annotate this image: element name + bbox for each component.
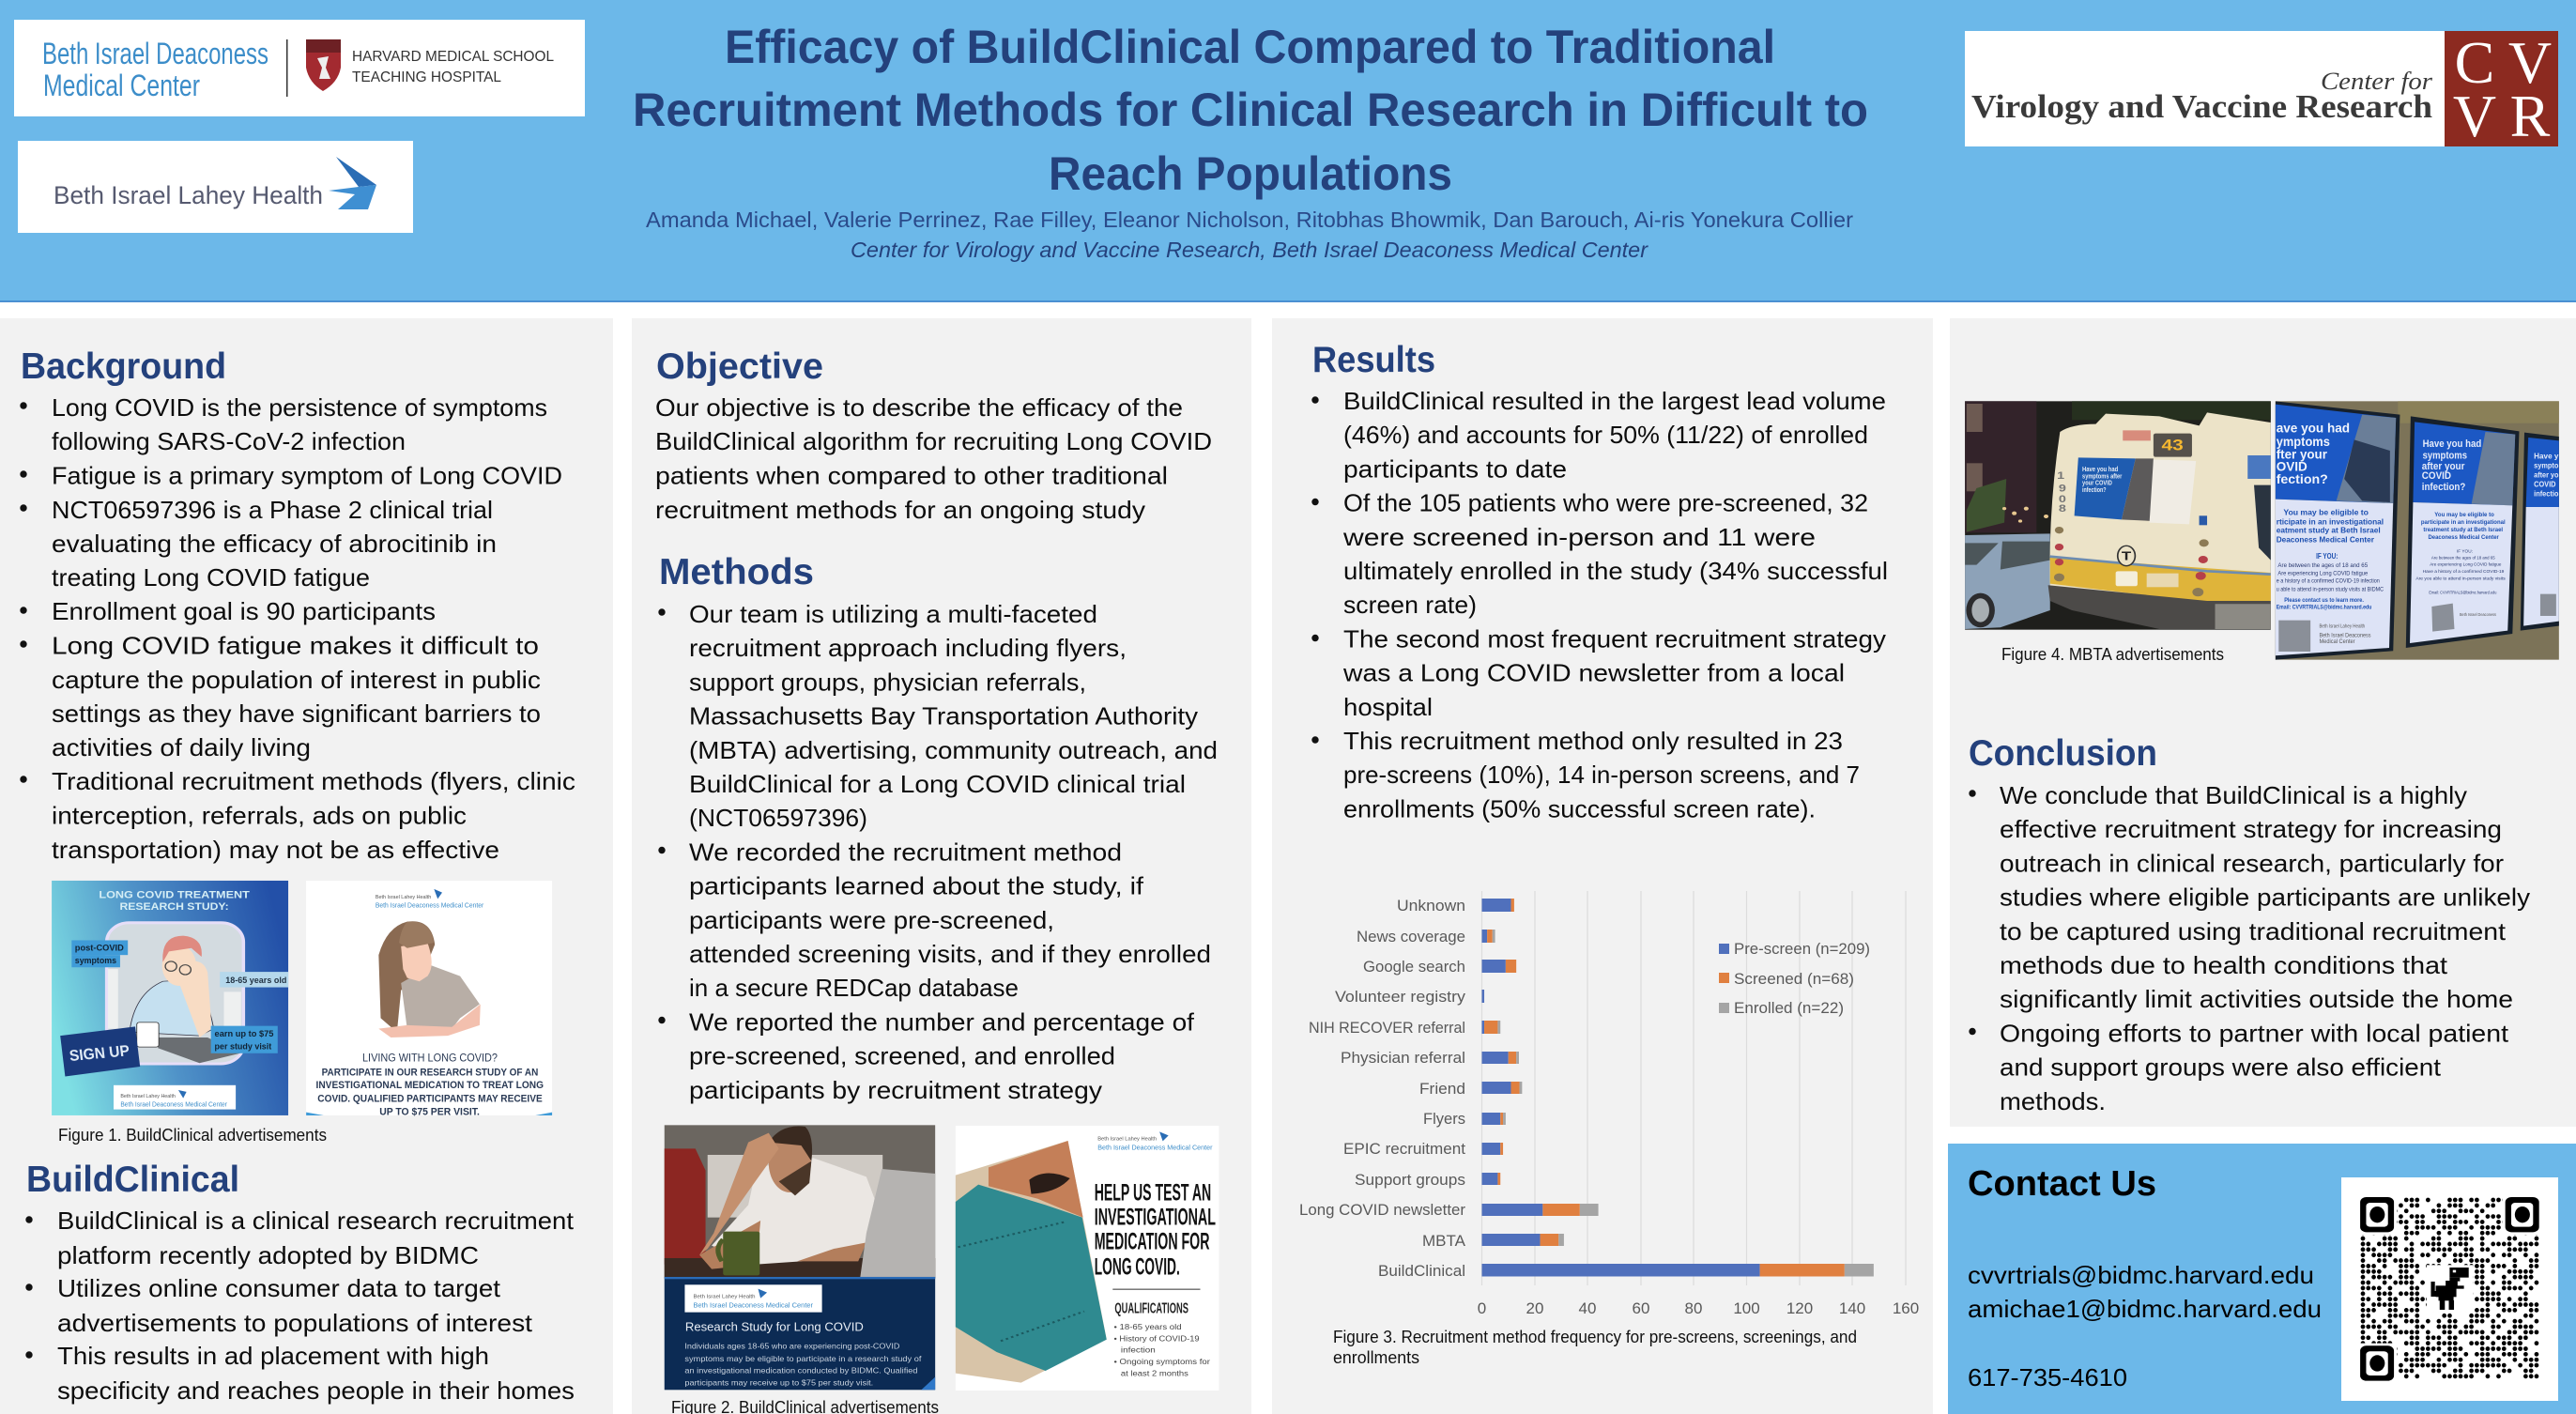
figure: MBTA station poster photo: sympto (2534, 461, 2558, 470)
figure: Long COVID treatment research study ad: earn up to $75 (215, 1030, 274, 1039)
figure: Long COVID treatment research study ad: Beth Israel Lahey Health (120, 1094, 176, 1099)
text block: Background bullets: Long COVID is the persistence of symptoms (52, 393, 547, 422)
figure: MBTA station poster photo: Beth Israel Deaconess (2319, 631, 2371, 638)
category labels: Google search (1363, 958, 1465, 976)
text block: Results bullets: The second most frequent recruitment strategy (1343, 625, 1886, 653)
text block: Objective (655, 393, 1212, 524)
text block: Methods bullets: We recorded the recruitment method (689, 838, 1122, 866)
authors: Amanda Michael, Valerie Perrinez, Rae Filley, Eleanor Nicholson, Ritobhas Bhowmik, Dan Barouch, Ai-ris Yonekura Collier (646, 207, 1853, 232)
figure: MBTA station poster photo: u able to attend in-person study visits at BIDMC (2277, 587, 2384, 592)
text block: Conclusion bullets: Ongoing efforts to partner with local patient (2000, 1020, 2509, 1048)
text block: Objective: BuildClinical algorithm for recruiting Long COVID (655, 427, 1212, 455)
figure: Living with Long COVID ad: Beth Israel Lahey Health (376, 895, 431, 900)
figure: MBTA station poster photo: rticipate in an investigational (2277, 517, 2384, 526)
text block: Methods bullets: BuildClinical for a Long COVID clinical trial (689, 770, 1186, 798)
axis tick labels: 60 (1633, 1299, 1649, 1317)
text block: Methods bullets: (MBTA) advertising, community outreach, and (689, 736, 1218, 764)
figure: MBTA station poster photo: You may be eligible to (2434, 511, 2494, 518)
legend: Screened (n=68) (1734, 970, 1854, 988)
text block: Conclusion bullets: and support groups were also efficient (2000, 1053, 2442, 1082)
figure: MBTA station poster photo: fection? (2277, 473, 2328, 486)
figure: MBTA bus advertisement photo: your COVID (2082, 479, 2112, 486)
figure: Research Study for Long COVID ad: participants may receive up to $75 per study visit. (684, 1379, 873, 1388)
logo: Center for Virology and Vaccine Research: Virology and Vaccine Research (1971, 88, 2432, 125)
figure: MBTA station poster photo: IF YOU: (2316, 552, 2338, 561)
bar chart: recruitment method frequency (1299, 891, 1919, 1317)
figure: MBTA station poster photo: COVID (2422, 469, 2451, 482)
icon: QR code with dinosaur (2341, 1177, 2558, 1401)
figure: MBTA station poster photo: eatment study at Beth Israel (2277, 527, 2381, 534)
text block: Results bullets: were screened in-person and 11 were (1342, 523, 1816, 551)
logo: Beth Israel Lahey Health: Beth Israel Lahey Health (54, 181, 323, 209)
category labels: NIH RECOVER referral (1309, 1019, 1465, 1037)
panel: Objective and Methods: HELP US TEST AN (1095, 1179, 1211, 1206)
title: Reach Populations (1049, 147, 1452, 200)
text block: BuildClinical bullets: advertisements to populations of interest (57, 1309, 533, 1337)
figure: MBTA station poster photo: Beth Israel Deaconess (2460, 612, 2496, 618)
text block: Background bullets: transportation) may not be as effective (52, 836, 499, 864)
figure: Help us test an investigational medication ad: Beth Israel Deaconess Medical Center (1097, 1144, 1213, 1151)
figure: Help us test an investigational medication ad: • History of COVID-19 (1114, 1334, 1200, 1344)
caption: Figure 4: Figure 4. MBTA advertisements (2001, 645, 2224, 664)
figure: MBTA bus advertisement photo: 9 (2059, 482, 2066, 494)
figure: MBTA station poster photo: fter your (2277, 448, 2327, 462)
figure: Research Study for Long COVID ad: Research Study for Long COVID (685, 1320, 864, 1334)
text block: Background bullets: Fatigue is a primary symptom of Long COVID (52, 462, 562, 490)
figure: MBTA station poster photo: OVID (2277, 460, 2308, 474)
text block: Results bullets: screen rate) (1343, 591, 1477, 619)
axis tick labels: 100 (1733, 1299, 1760, 1317)
text block: Conclusion bullets: We conclude that BuildClinical is a highly (2000, 781, 2467, 809)
text block: Results bullets: pre-screens (10%), 14 in-person screens, and 7 (1343, 761, 1860, 789)
figure: MBTA station poster photo: Are experiencing Long COVID fatigue (2277, 571, 2368, 576)
caption: Figure 1: Figure 1. BuildClinical advertisements (58, 1126, 327, 1145)
logo: Center for Virology and Vaccine Research: C (2455, 29, 2494, 96)
figure: Living with Long COVID ad (306, 881, 552, 1117)
category labels: Long COVID newsletter (1299, 1201, 1465, 1219)
text block: Background bullets: Traditional recruitment methods (flyers, clinic (52, 767, 575, 795)
panel: Objective and Methods: MEDICATION FOR (1095, 1228, 1209, 1255)
heading: Results: Results (1312, 340, 1435, 380)
text block: BuildClinical bullets: This results in ad placement with high (57, 1342, 489, 1370)
text block: Background bullets: capture the population of interest in public (52, 666, 541, 694)
contact details: cvvrtrials@bidmc.harvard.edu (1968, 1261, 2314, 1289)
logo: Beth Israel Deaconess Medical Center / Harvard Medical School: TEACHING HOSPITAL (352, 69, 501, 85)
text block: Conclusion bullets: to be captured using traditional recruitment (2000, 917, 2507, 945)
figure: Living with Long COVID ad: UP TO $75 PER VISIT. (379, 1105, 480, 1117)
text block: Results bullets: was a Long COVID newsletter from a local (1342, 659, 1845, 687)
category labels (1299, 897, 1466, 1280)
text block: Results bullets (1311, 387, 1888, 822)
axis tick labels: 80 (1685, 1299, 1702, 1317)
figure: Help us test an investigational medication ad: Beth Israel Lahey Health (1097, 1137, 1157, 1142)
text block: Methods bullets: Our team is utilizing a multi-faceted (689, 600, 1097, 628)
heading: Contact Us: Contact Us (1968, 1164, 2156, 1204)
heading: BuildClinical: BuildClinical (26, 1160, 239, 1200)
figure: MBTA station poster photo: Have y (2534, 452, 2559, 461)
figure: MBTA station poster photo: treatment study at Beth Israel (2423, 526, 2503, 533)
figure: MBTA bus advertisement photo: Have you had (2082, 465, 2118, 473)
category labels: Support groups (1355, 1171, 1465, 1189)
heading: Background: Background (21, 346, 226, 387)
figure: MBTA station poster photo: Have you had (2423, 438, 2481, 450)
figure: MBTA station poster photo: ymptoms (2277, 436, 2330, 449)
heading: Methods: Methods (659, 552, 814, 592)
figure: Research Study for Long COVID ad (665, 1125, 935, 1390)
figure: MBTA station poster photo: Please contact us to learn more. (2284, 598, 2364, 604)
figure: Help us test an investigational medication ad: infection (1121, 1346, 1156, 1355)
text block: Conclusion bullets: significantly limit activities outside the home (2000, 985, 2513, 1013)
text block: Methods bullets: support groups, physician referrals, (689, 669, 1086, 697)
caption: Figure 3: enrollments (1333, 1348, 1419, 1367)
title (633, 21, 1868, 200)
panel: Objective and Methods: INVESTIGATIONAL (1095, 1204, 1216, 1230)
figure: MBTA station poster photo: Are you able to attend in-person study visits (2415, 576, 2506, 581)
text block: Background bullets: Long COVID fatigue makes it difficult to (52, 631, 539, 659)
text block: Results bullets: (46%) and accounts for 50% (11/22) of enrolled (1343, 421, 1868, 449)
panel: Objective and Methods (632, 318, 1251, 1414)
figure: MBTA bus advertisement photo: 43 (2162, 437, 2184, 454)
legend: Pre-screen (n=209) (1734, 940, 1870, 958)
logo: Beth Israel Deaconess Medical Center / Harvard Medical School: Beth Israel Deaconess (42, 37, 268, 70)
figure: Research Study for Long COVID ad: an investigational medication conducted by BIDMC. Qualified (684, 1366, 918, 1376)
text block: Conclusion bullets: methods due to health conditions that (2000, 951, 2448, 979)
text block: Background bullets: Enrollment goal is 90 participants (52, 597, 436, 625)
figure: MBTA station poster photo: Medical Center (2319, 638, 2355, 645)
text block: Methods bullets: in a secure REDCap database (689, 974, 1019, 1002)
logo: Beth Israel Deaconess Medical Center / Harvard Medical School: HARVARD MEDICAL SCHOOL (352, 49, 554, 65)
axis tick labels: 0 (1478, 1299, 1486, 1317)
figure: MBTA station poster photo: Email: CVVRTRIALS@bidmc.harvard.edu (2277, 605, 2371, 610)
affiliation: Center for Virology and Vaccine Research, Beth Israel Deaconess Medical Center (851, 238, 1648, 262)
figure: Help us test an investigational medication ad: LONG COVID. (1095, 1253, 1180, 1281)
text block: BuildClinical bullets (25, 1207, 575, 1405)
figure: Long COVID treatment research study ad: 18-65 years old (225, 976, 286, 986)
text block: Results bullets: BuildClinical resulted in the largest lead volume (1343, 387, 1886, 415)
panel: Contact Us (1948, 1144, 2576, 1414)
figure: MBTA station poster photo: IF YOU: (2457, 549, 2473, 554)
figure: MBTA station poster photo: Are between the ages of 18 and 65 (2277, 563, 2368, 569)
contact details: 617-735-4610 (1968, 1363, 2127, 1391)
figure: Long COVID treatment research study ad (52, 881, 288, 1115)
figure: MBTA station poster photo: Deaconess Medical Center (2429, 533, 2499, 541)
figure: MBTA station poster photo: Deaconess Medical Center (2277, 535, 2374, 544)
figure: MBTA station poster photo: Email: CVVRTRIALS@bidmc.harvard.edu (2429, 591, 2496, 595)
figure: Long COVID treatment research study ad: RESEARCH STUDY: (120, 900, 229, 913)
legend: Enrolled (n=22) (1734, 999, 1844, 1017)
figure: MBTA station poster photo: COVID (2534, 480, 2555, 489)
logo: Beth Israel Lahey Health (18, 141, 413, 233)
text block: Conclusion bullets: studies where eligible participants are unlikely (2000, 883, 2530, 911)
figure: Living with Long COVID ad: COVID. QUALIFIED PARTICIPANTS MAY RECEIVE (317, 1092, 543, 1104)
figure: MBTA bus advertisement photo: 0 (2059, 492, 2066, 505)
figure: Living with Long COVID ad: INVESTIGATIONAL MEDICATION TO TREAT LONG (316, 1079, 544, 1091)
figure: MBTA station poster photo: symptoms (2423, 450, 2467, 461)
text block: Objective: Our objective is to describe the efficacy of the (655, 393, 1183, 422)
figure: MBTA station poster photo: infectio (2534, 489, 2558, 499)
figure: MBTA station poster photo (2276, 401, 2559, 660)
axis tick labels: 140 (1839, 1299, 1865, 1317)
axis tick labels: 40 (1579, 1299, 1596, 1317)
figure: Help us test an investigational medication ad: QUALIFICATIONS (1114, 1300, 1188, 1316)
figure: Long COVID treatment research study ad: post-COVID (75, 944, 124, 953)
text block: Conclusion bullets: outreach in clinical research, particularly for (2000, 849, 2504, 877)
contact details (1968, 1261, 2322, 1391)
figure: MBTA station poster photo: Have a history of a confirmed COVID-19 (2423, 569, 2504, 575)
figure: MBTA bus advertisement photo (1965, 401, 2271, 630)
category labels: News coverage (1357, 928, 1465, 945)
logo: Center for Virology and Vaccine Research: R (2510, 83, 2551, 149)
text block: Results bullets: enrollments (50% successful screen rate). (1343, 794, 1816, 822)
figure: MBTA station poster photo: after your (2422, 460, 2465, 472)
title: Efficacy of BuildClinical Compared to Traditional (725, 21, 1775, 73)
figure: Living with Long COVID ad: PARTICIPATE IN OUR RESEARCH STUDY OF AN (322, 1066, 538, 1078)
figure: Help us test an investigational medication ad: at least 2 months (1121, 1369, 1188, 1378)
text block: Methods bullets: (NCT06597396) (689, 804, 867, 832)
figure: Long COVID treatment research study ad: SIGN UP (69, 1042, 130, 1065)
figure: MBTA station poster photo: infection? (2422, 481, 2465, 493)
axis tick labels: 20 (1526, 1299, 1543, 1317)
figure: Long COVID treatment research study ad: per study visit (215, 1042, 272, 1052)
figure: MBTA station poster photo: Beth Israel Lahey Health (2319, 623, 2365, 629)
figure: Long COVID treatment research study ad: symptoms (75, 957, 116, 966)
text block: BuildClinical bullets: specificity and reaches people in their homes (57, 1376, 575, 1405)
caption: Figure 3: Figure 3. Recruitment method frequency for pre-screens, screenings, and (1333, 1328, 1857, 1346)
figure: MBTA station poster photo: Are experiencing Long COVID fatigue (2430, 562, 2501, 567)
text block: BuildClinical bullets: BuildClinical is a clinical research recruitment (57, 1207, 575, 1235)
contact details: amichae1@bidmc.harvard.edu (1968, 1295, 2322, 1323)
figure: Help us test an investigational medication ad: • 18-65 years old (1114, 1323, 1182, 1332)
text block: Background bullets: NCT06597396 is a Phase 2 clinical trial (52, 496, 493, 524)
heading: Conclusion: Conclusion (1969, 733, 2157, 774)
logo: Center for Virology and Vaccine Research: Center for (2321, 68, 2433, 95)
category labels: BuildClinical (1378, 1262, 1465, 1280)
text block: Methods bullets: pre-screened, screened, and enrolled (689, 1042, 1115, 1070)
text block: Methods bullets: attended screening visits, and if they enrolled (689, 940, 1211, 968)
axis tick labels (1478, 1299, 1919, 1317)
logo: Center for Virology and Vaccine Research: V (2453, 83, 2496, 149)
text block: Background bullets: following SARS-CoV-2 infection (52, 427, 406, 455)
figure: MBTA bus advertisement photo: symptoms after (2082, 471, 2123, 480)
text block: Methods bullets: participants were pre-screened, (689, 906, 1054, 934)
text block: BuildClinical bullets: Utilizes online consumer data to target (57, 1274, 501, 1302)
figure: MBTA bus advertisement photo: infection? (2082, 485, 2106, 494)
figure: MBTA station poster photo: after yo (2534, 470, 2558, 480)
category labels: MBTA (1422, 1232, 1466, 1250)
figure: MBTA bus advertisement photo: 1 (2057, 469, 2064, 482)
figure: MBTA bus advertisement photo: T (2122, 549, 2132, 563)
panel: Background and BuildClinical (0, 318, 613, 1414)
figure: MBTA bus advertisement photo: 8 (2059, 501, 2066, 515)
text block: Background bullets (20, 393, 575, 864)
text block: Conclusion bullets: methods. (2000, 1087, 2106, 1115)
category labels: Physician referral (1341, 1049, 1465, 1067)
figure: MBTA station poster photo: e a history of a confirmed COVID-19 infection (2277, 578, 2380, 584)
header banner (0, 0, 2576, 302)
category labels: Flyers (1423, 1110, 1465, 1128)
text block: Conclusion bullets: effective recruitment strategy for increasing (2000, 815, 2502, 843)
text block: Objective: recruitment methods for an ongoing study (655, 496, 1145, 524)
figure: Help us test an investigational medication ad (956, 1126, 1219, 1391)
figure: Long COVID treatment research study ad: LONG COVID TREATMENT (99, 888, 250, 900)
figure: MBTA station poster photo: ave you had (2277, 422, 2350, 436)
text block: Methods bullets: We reported the number and percentage of (689, 1008, 1195, 1037)
text block: Background bullets: interception, referrals, ads on public (52, 802, 467, 830)
logo: Beth Israel Deaconess Medical Center / Harvard Medical School (14, 20, 585, 116)
axis tick labels: 160 (1893, 1299, 1919, 1317)
panel: Results (1272, 318, 1933, 1414)
text block: Results bullets: participants to date (1343, 454, 1567, 483)
figure: Long COVID treatment research study ad: Beth Israel Deaconess Medical Center (120, 1100, 227, 1108)
logo: Beth Israel Deaconess Medical Center / Harvard Medical School: Medical Center (43, 69, 200, 102)
text block: Methods bullets (658, 600, 1218, 1104)
category labels: Unknown (1397, 897, 1465, 914)
text block: Background bullets: evaluating the efficacy of abrocitinib in (52, 530, 497, 558)
figure: Help us test an investigational medication ad: • Ongoing symptoms for (1114, 1358, 1211, 1367)
title: Recruitment Methods for Clinical Research in Difficult to (633, 84, 1868, 136)
logo: Center for Virology and Vaccine Research (1965, 29, 2558, 149)
text block: Background bullets: settings as they have significant barriers to (52, 699, 541, 728)
figure: Living with Long COVID ad: LIVING WITH LONG COVID? (362, 1051, 498, 1064)
figure: MBTA station poster photo: participate in an investigational (2421, 518, 2506, 526)
logo: Center for Virology and Vaccine Research: V (2508, 29, 2552, 96)
category labels: Volunteer registry (1335, 988, 1466, 1006)
text block: Methods bullets: participants by recruitment strategy (689, 1076, 1102, 1104)
heading: Objective: Objective (656, 346, 823, 387)
text block: Background bullets: treating Long COVID fatigue (52, 563, 370, 592)
figure: Research Study for Long COVID ad: symptoms may be eligible to participate in a research study of (684, 1355, 922, 1364)
figure: MBTA station poster photo: You may be eligible to (2283, 508, 2369, 516)
text block: BuildClinical bullets: platform recently adopted by BIDMC (57, 1241, 479, 1269)
category labels: EPIC recruitment (1343, 1140, 1465, 1158)
text block: Methods bullets: recruitment approach including flyers, (689, 634, 1127, 662)
text block: Objective: patients when compared to other traditional (655, 462, 1168, 490)
figure: MBTA station poster photo: Are between the ages of 18 and 65 (2431, 556, 2495, 561)
stacked bars (1481, 899, 1874, 1277)
panel: MBTA figure and Conclusion (1950, 318, 2576, 1127)
text block: Conclusion bullets (1969, 781, 2530, 1115)
category labels: Friend (1419, 1080, 1465, 1098)
text block: Results bullets: ultimately enrolled in the study (34% successful (1343, 557, 1888, 585)
figure: Living with Long COVID ad: Beth Israel Deaconess Medical Center (376, 901, 483, 909)
figure: Research Study for Long COVID ad: Beth Israel Deaconess Medical Center (694, 1301, 813, 1309)
text block: Methods bullets: Massachusetts Bay Transportation Authority (689, 702, 1198, 730)
text block: Methods bullets: participants learned about the study, if (689, 871, 1144, 899)
text block: Background bullets: activities of daily living (52, 733, 311, 761)
figure: Research Study for Long COVID ad: Individuals ages 18-65 who are experiencing post-COVID (684, 1343, 899, 1351)
text block: Results bullets: hospital (1343, 693, 1433, 721)
text block: Results bullets: This recruitment method only resulted in 23 (1343, 727, 1843, 755)
text block: Results bullets: Of the 105 patients who were pre-screened, 32 (1343, 488, 1868, 516)
figure: Research Study for Long COVID ad: Beth Israel Lahey Health (694, 1294, 756, 1299)
legend (1719, 940, 1870, 1017)
caption: Figure 3 (1333, 1328, 1857, 1367)
axis tick labels: 120 (1786, 1299, 1813, 1317)
